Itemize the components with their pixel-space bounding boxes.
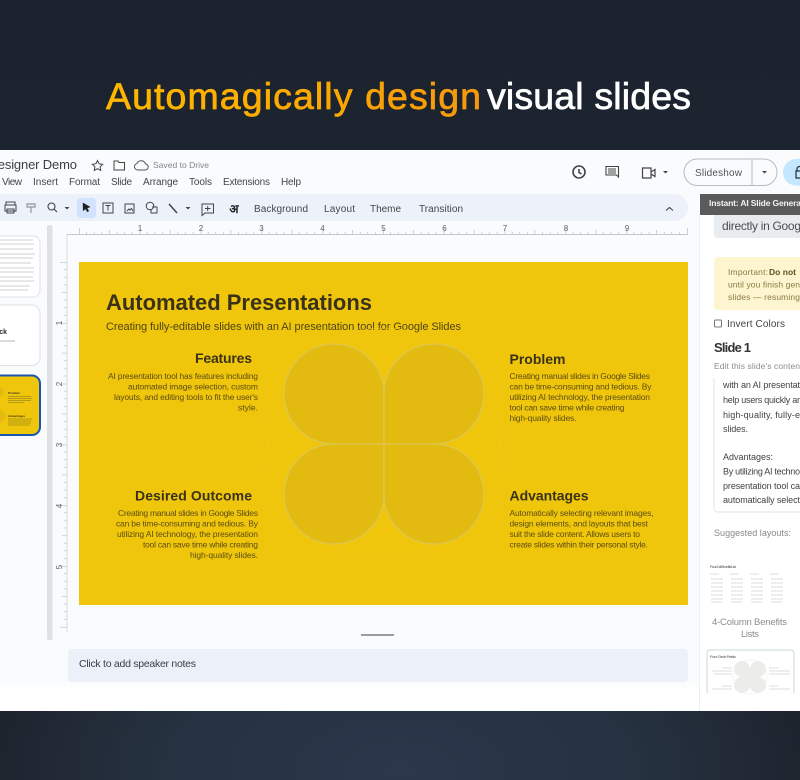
icon: shape xyxy=(146,202,157,213)
block: features: style. xyxy=(238,402,258,412)
block: desired outcome xyxy=(116,488,259,560)
icon: zoom xyxy=(48,203,57,212)
icon: image xyxy=(125,204,134,213)
icon: select tool xyxy=(77,198,96,218)
diagram: four petals xyxy=(268,328,500,560)
slideshow button: Slideshow xyxy=(695,168,743,179)
toolbar labels: Transition xyxy=(419,204,463,215)
block: features: AI presentation tool has features including xyxy=(108,371,258,381)
slide heading: Automated Presentations xyxy=(106,290,372,315)
icon: input tools: अ xyxy=(229,202,239,216)
menu bar: Insert xyxy=(33,177,58,188)
horizontal ruler: 2 xyxy=(199,224,204,233)
block: desired outcome: tool can save time while creating xyxy=(143,540,258,550)
horizontal ruler: 5 xyxy=(381,224,386,233)
toolbar labels: Theme xyxy=(370,204,401,215)
icon: print xyxy=(5,202,16,213)
panel: add-on sidebar xyxy=(700,194,800,711)
speaker notes: Click to add speaker notes xyxy=(79,658,196,670)
horizontal ruler: 8 xyxy=(564,224,569,233)
notes resize handle xyxy=(361,634,394,636)
slide content textarea: help users quickly ar xyxy=(723,395,800,405)
icon: version history xyxy=(573,166,585,178)
block: advantages: design elements, and layouts that best xyxy=(510,518,649,528)
slide 1 heading: Slide 1 xyxy=(714,340,751,355)
slide content textarea: By utilizing AI techno xyxy=(723,466,800,476)
menu bar: Format xyxy=(69,177,100,188)
icon: add comment xyxy=(202,204,214,216)
block: features xyxy=(108,350,258,412)
layout option: four column list: Four-Col Benefits List xyxy=(710,564,737,569)
prompt box xyxy=(714,210,800,238)
slide content textarea xyxy=(714,378,800,512)
toolbar labels xyxy=(254,204,463,215)
slide 1 hint: Edit this slide's conten xyxy=(714,361,800,371)
thumbnail: title slide xyxy=(0,305,40,366)
block: features: layouts, and editing tools to fit the user's xyxy=(114,392,258,402)
sidebar header xyxy=(700,194,800,215)
vertical ruler: 5 xyxy=(55,564,64,569)
warning note: slides — resuming xyxy=(728,292,800,302)
invert colors option: Invert Colors xyxy=(727,319,785,330)
slide content textarea: slides. xyxy=(723,424,748,434)
block: problem: high-quality slides. xyxy=(510,413,576,423)
title: Automagically design xyxy=(106,75,481,117)
horizontal ruler: 9 xyxy=(625,224,630,233)
block: desired outcome: high-quality slides. xyxy=(190,550,258,560)
slideshow button xyxy=(684,159,777,186)
slide content textarea: presentation tool ca xyxy=(723,481,800,491)
warning note: Important: xyxy=(728,267,768,277)
prompt box: directly in Goog xyxy=(722,219,800,233)
block: problem: Problem xyxy=(510,351,566,367)
vertical ruler xyxy=(55,234,67,632)
icon: comments xyxy=(606,166,618,177)
suggested layouts label: Suggested layouts: xyxy=(714,528,791,538)
title xyxy=(106,75,691,117)
horizontal ruler: 1 xyxy=(138,224,143,233)
icon: cloud saved xyxy=(134,161,148,170)
thumbnail: selected yellow slide xyxy=(0,376,40,435)
slide content textarea: automatically select xyxy=(723,495,800,505)
vertical ruler: 2 xyxy=(55,381,64,386)
block: features: automated image selection, custom xyxy=(128,382,258,392)
block: problem: can be time-consuming and tedious. By xyxy=(510,382,652,392)
block: desired outcome: utilizing AI technology, the presentation xyxy=(117,529,258,539)
icon: star xyxy=(92,160,103,170)
menu bar: Tools xyxy=(189,177,212,188)
panel: slides editor screenshot xyxy=(0,157,800,711)
icon: folder xyxy=(114,161,124,170)
icon: text box xyxy=(103,203,113,213)
layout option: four column list: Lists xyxy=(741,629,759,640)
menu bar: Slide xyxy=(111,177,132,188)
vertical ruler: 1 xyxy=(55,320,64,325)
top right actions xyxy=(573,159,800,186)
menu bar xyxy=(2,177,301,188)
menu bar: Extensions xyxy=(223,177,270,188)
block: problem xyxy=(510,351,652,423)
document title bar xyxy=(0,157,209,172)
horizontal ruler: 3 xyxy=(259,224,264,233)
menu bar: View xyxy=(2,177,23,188)
slide content textarea: Advantages: xyxy=(723,452,773,462)
block: desired outcome: can be time-consuming and tedious. By xyxy=(116,518,259,528)
thumbnail: selected yellow slide: Problem xyxy=(8,391,20,395)
block: advantages xyxy=(510,488,654,550)
menu bar: Help xyxy=(281,177,301,188)
layout option: four column list xyxy=(710,564,787,640)
horizontal ruler xyxy=(67,224,688,234)
layout option: four circle petals: Four Circle Petals xyxy=(710,654,737,659)
block: advantages: create slides within their personal style. xyxy=(510,540,648,550)
block: desired outcome: Creating manual slides in Google Slides xyxy=(118,508,258,518)
toolbar labels: Background xyxy=(254,204,308,215)
menu bar: Arrange xyxy=(143,177,178,188)
thumbnail: text slide xyxy=(0,236,40,297)
sidebar header: Instant: AI Slide Genera xyxy=(709,198,800,208)
horizontal ruler: 7 xyxy=(503,224,508,233)
filmstrip scrollbar xyxy=(47,225,52,640)
vertical ruler: 4 xyxy=(55,503,64,508)
block: advantages: suit the slide content. Allows users to xyxy=(510,529,640,539)
vertical ruler: 3 xyxy=(55,442,64,447)
slide subtitle: Creating fully-editable slides with an AI presentation tool for Google Slides xyxy=(106,321,462,333)
icon: paint format xyxy=(27,204,35,213)
horizontal ruler: 6 xyxy=(442,224,447,233)
speaker notes xyxy=(68,649,688,682)
slide content textarea: high-quality, fully-e xyxy=(723,410,800,420)
icon: line xyxy=(169,204,177,213)
block: problem: utilizing AI technology, the presentation xyxy=(510,392,650,402)
block: problem: tool can save time while creating xyxy=(510,402,625,412)
warning note: Do not xyxy=(769,267,796,277)
title: visual slides xyxy=(487,75,691,117)
block: desired outcome: Desired Outcome xyxy=(135,488,252,504)
warning note xyxy=(714,257,800,310)
horizontal ruler: 4 xyxy=(320,224,325,233)
main slide: automated presentations xyxy=(79,262,688,605)
layout option: four column list: 4-Column Benefits xyxy=(712,617,787,628)
toolbar labels: Layout xyxy=(324,204,355,215)
thumbnail: selected yellow slide: Advantages xyxy=(8,414,25,418)
layout option: four circle petals xyxy=(707,650,794,694)
saved status: Saved to Drive xyxy=(153,160,209,170)
share button xyxy=(783,159,800,186)
block: advantages: Advantages xyxy=(510,488,589,504)
block: problem: Creating manual slides in Google Slides xyxy=(510,371,650,381)
block: features: Features xyxy=(195,350,252,366)
screenshot backdrop xyxy=(0,150,800,711)
toolbar xyxy=(0,194,688,221)
warning note: until you finish gen xyxy=(728,280,800,290)
icon: meet camera xyxy=(642,168,655,178)
slide content textarea: with an AI presentat xyxy=(722,380,800,390)
block: advantages: Automatically selecting relevant images, xyxy=(510,508,654,518)
